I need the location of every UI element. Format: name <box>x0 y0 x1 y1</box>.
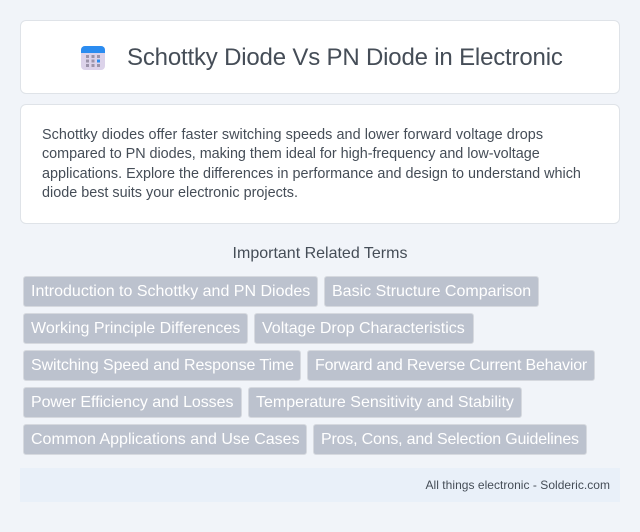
intro text: Schottky diodes offer faster switching speeds and lower forward voltage drops <box>42 127 543 143</box>
footer bar <box>20 468 620 502</box>
intro panel <box>20 104 620 224</box>
intro text: compared to PN diodes, making them ideal for high-frequency and low-voltage <box>42 146 540 162</box>
chip: Power Efficiency and Losses <box>31 394 233 411</box>
related terms heading: Important Related Terms <box>233 245 407 262</box>
chip <box>23 387 242 418</box>
intro text: diode best suits your electronic projects. <box>42 185 298 201</box>
chip: Forward and Reverse Current Behavior <box>315 357 587 374</box>
chip <box>313 424 587 455</box>
chip: Basic Structure Comparison <box>332 283 531 300</box>
chip: Temperature Sensitivity and Stability <box>256 394 514 411</box>
intro text <box>42 127 581 201</box>
chip: Voltage Drop Characteristics <box>262 320 465 337</box>
chip: Common Applications and Use Cases <box>31 431 300 448</box>
chip <box>23 276 318 307</box>
chip: Working Principle Differences <box>31 320 240 337</box>
footer text: All things electronic - Solderic.com <box>426 478 610 492</box>
chip <box>248 387 522 418</box>
chip <box>23 424 307 455</box>
chip <box>23 350 301 381</box>
chip: Pros, Cons, and Selection Guidelines <box>321 431 579 448</box>
header panel <box>20 20 620 94</box>
chip <box>324 276 539 307</box>
related terms chips <box>23 276 595 455</box>
icon: calendar <box>81 46 105 70</box>
chip <box>254 313 474 344</box>
chip: Switching Speed and Response Time <box>31 357 294 374</box>
intro text: applications. Explore the differences in performance and design to understand which <box>42 166 581 182</box>
chip <box>23 313 248 344</box>
chip: Introduction to Schottky and PN Diodes <box>31 283 310 300</box>
title: Schottky Diode Vs PN Diode in Electronic <box>127 44 563 71</box>
chip <box>307 350 595 381</box>
